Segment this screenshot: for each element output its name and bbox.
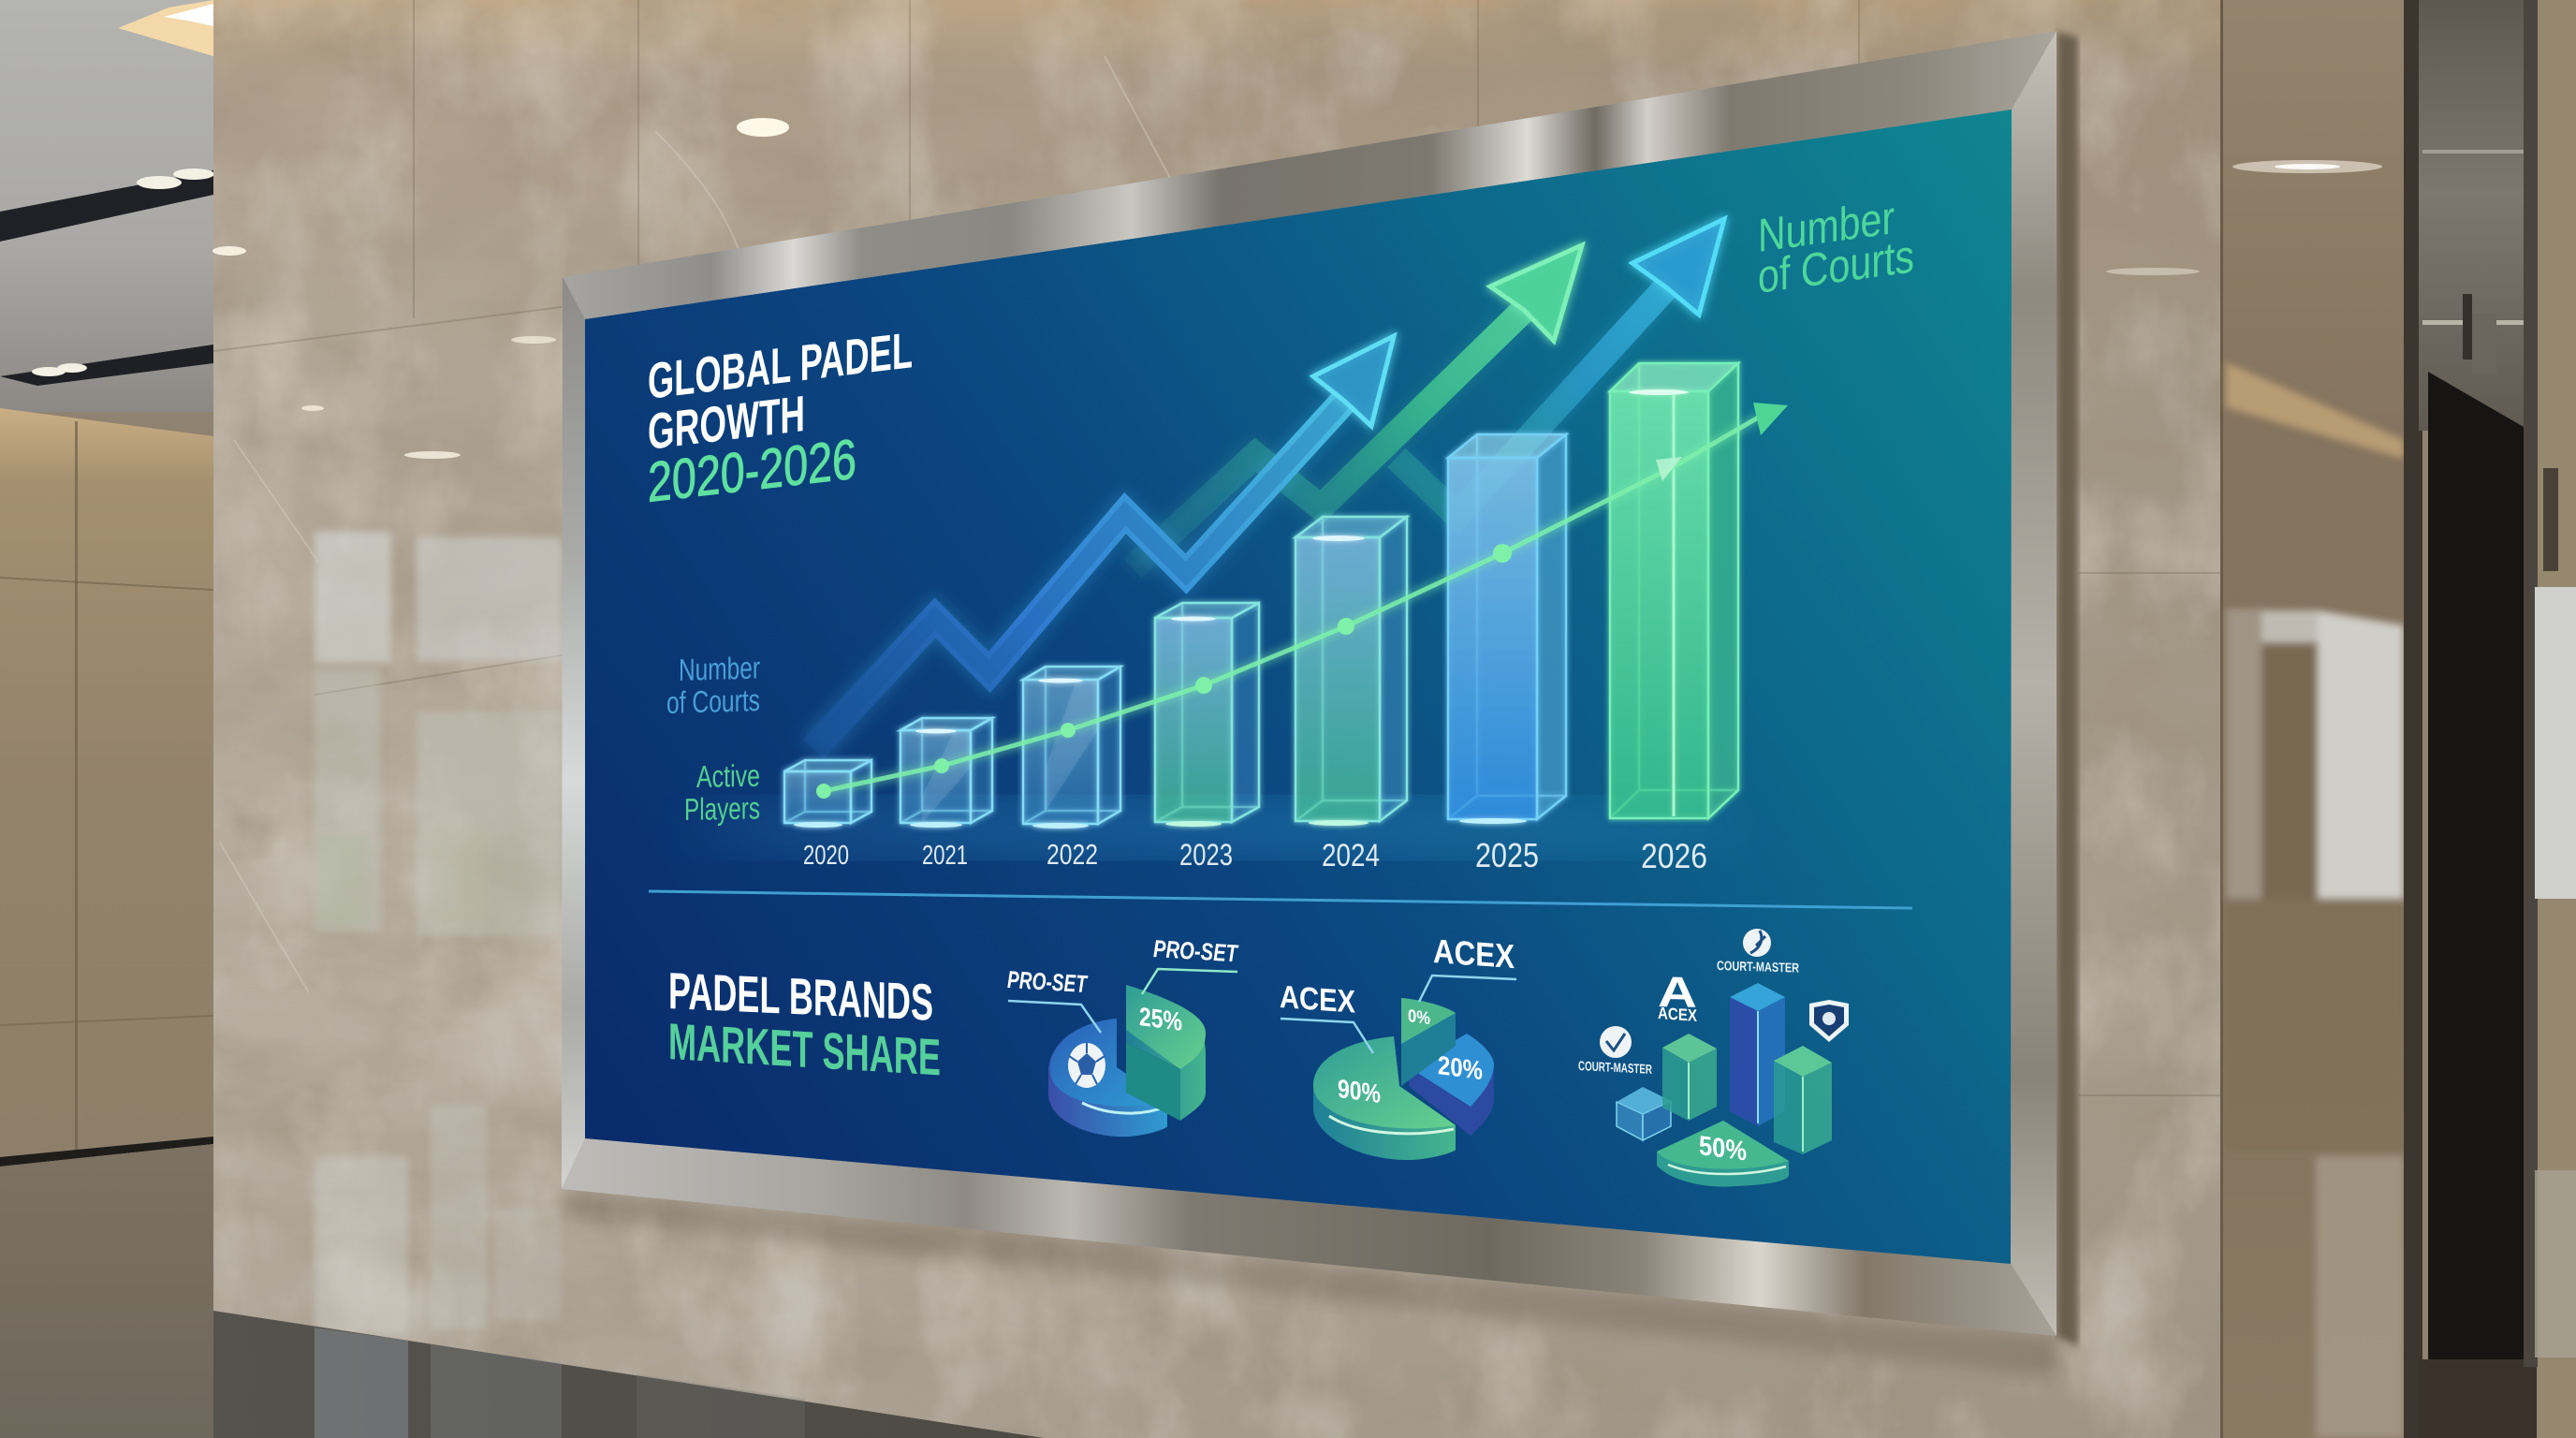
logo: shield: [1809, 1000, 1849, 1042]
value: 90 percent: 90%: [1338, 1074, 1381, 1108]
legend: active players, left axis: [684, 758, 760, 827]
title: Global Padel Growth 2020-2026: GLOBAL PADEL: [648, 322, 913, 410]
heading: Padel Brands Market Share: PADEL BRANDS: [668, 961, 933, 1032]
axis: year labels: 2020: [803, 841, 849, 871]
legend: number of courts, top right: [1758, 191, 1914, 303]
background: polished floor: [213, 1311, 1044, 1438]
column: small cube: [1617, 1087, 1671, 1140]
legend: number of courts, top right: of Courts: [1758, 229, 1914, 303]
value: 50 percent: 50%: [1699, 1131, 1747, 1167]
chart: isometric brand columns: [1578, 929, 1849, 1187]
axis: year labels: 2021: [922, 841, 968, 871]
logo: Acex mark: [1658, 967, 1697, 1025]
arrow: first courts arrow, zigzag blue: [813, 336, 1394, 749]
legend: active players, left axis: Active: [696, 758, 760, 794]
logo: Acex mark: ACEX: [1658, 1004, 1697, 1025]
chart: pie one, Pro-Set: [1007, 934, 1239, 1137]
slice: blue 20 percent: [1409, 1034, 1494, 1136]
background: window reflections in marble: [315, 532, 562, 1334]
bar: 2023: [1155, 603, 1259, 827]
frame: brushed steel mitred border: [562, 31, 2056, 1336]
slice: green 25 percent: [1126, 985, 1206, 1121]
legend: number of courts, top right: Number: [1758, 191, 1895, 262]
label: Pro-Set left: PRO-SET: [1007, 965, 1089, 998]
label: Pro-Set left: [1007, 965, 1101, 1033]
frame: side shadow on wall: [562, 31, 2078, 1376]
axis: year labels: [803, 836, 1707, 875]
column: left green: [1662, 1034, 1717, 1121]
value: 20 percent: 20%: [1438, 1050, 1483, 1085]
bar: 2020: [784, 760, 871, 828]
label: Pro-Set right: [1142, 934, 1239, 994]
column: right green: [1774, 1046, 1832, 1154]
arrow: second courts arrow, green: [1133, 245, 1582, 568]
label: Pro-Set right: PRO-SET: [1153, 934, 1239, 967]
bar: 2022: [1023, 667, 1120, 829]
axis: year labels: 2025: [1475, 836, 1539, 874]
slice: green 0 percent: [1401, 998, 1456, 1086]
slice: green 90 percent: [1313, 1036, 1456, 1160]
legend: number of courts, left axis: of Courts: [666, 682, 760, 720]
legend: active players, left axis: Players: [684, 790, 760, 827]
background: right marble panel and elevator: [2220, 0, 2576, 1438]
title: Global Padel Growth 2020-2026: [648, 322, 913, 514]
panel: poster screen: [585, 110, 2012, 1264]
bar: 2025: [1448, 434, 1566, 824]
logo: Court-Master top: COURT-MASTER: [1717, 958, 1799, 976]
chart: pie two, Acex: [1280, 932, 1516, 1160]
bar: 2026: [1610, 363, 1738, 818]
arrow: third courts arrow, blue: [1397, 219, 1724, 516]
label: Acex right: [1419, 932, 1516, 1002]
logo: Court-Master left: COURT-MASTER: [1578, 1058, 1652, 1077]
axis: year labels: 2024: [1322, 838, 1380, 873]
slice: green 50 percent: [1657, 1121, 1789, 1187]
title: Global Padel Growth 2020-2026: 2020-2026: [648, 428, 856, 514]
legend: number of courts, left axis: [666, 650, 760, 720]
heading: Padel Brands Market Share: MARKET SHARE: [668, 1012, 941, 1086]
logo: Acex mark: A: [1658, 967, 1697, 1017]
label: Acex left: ACEX: [1280, 979, 1355, 1020]
legend: number of courts, left axis: Number: [679, 650, 760, 687]
chart: active players line: [816, 403, 1788, 799]
axis: year labels: 2022: [1046, 838, 1098, 871]
axis: year labels: 2023: [1179, 838, 1233, 872]
axis: year labels: 2026: [1641, 837, 1707, 875]
value: 0 percent: 0%: [1408, 1006, 1430, 1029]
value: 25 percent: 25%: [1139, 1002, 1182, 1036]
bar: 2024: [1295, 517, 1407, 826]
logo: Court-Master top: [1717, 929, 1799, 976]
icon: football badge: [1068, 1043, 1105, 1088]
heading: Padel Brands Market Share: [668, 961, 941, 1086]
chart: glass bars by year: [693, 363, 1741, 848]
label: Acex left: [1280, 979, 1373, 1053]
slice: blue Pro-Set: [1048, 1019, 1167, 1137]
title: Global Padel Growth 2020-2026: GROWTH: [648, 386, 805, 461]
label: Acex right: ACEX: [1433, 932, 1515, 976]
background: left corridor ceiling, wood wall and floor: [0, 0, 215, 1438]
bar: 2021: [900, 718, 992, 828]
logo: Court-Master left: [1578, 1026, 1652, 1077]
background: marble column wall: [212, 0, 2226, 1438]
chart: court growth arrows: [813, 219, 1724, 749]
column: tall blue: [1730, 983, 1785, 1126]
